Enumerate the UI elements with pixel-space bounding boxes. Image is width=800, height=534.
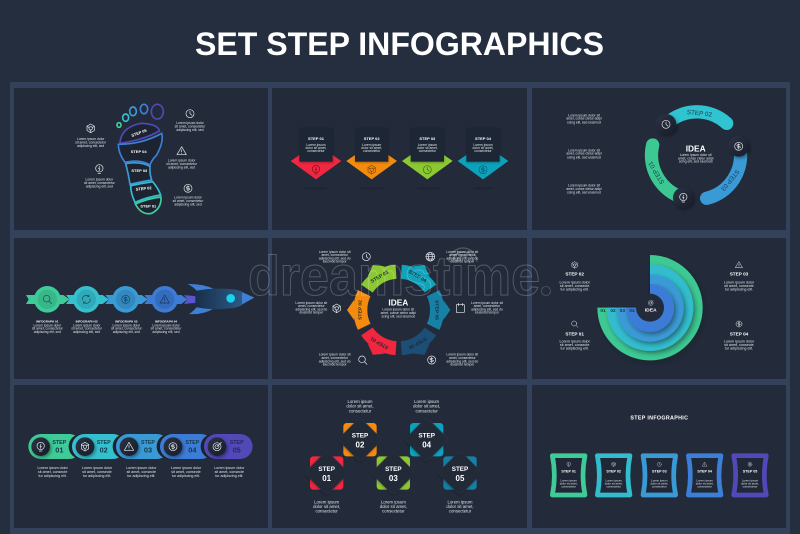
footprint captions: sit amet, consectetur — [75, 140, 107, 144]
footprint captions: adipiscing elit, sed — [77, 144, 104, 148]
pill captions: Lorem ipsum dolor — [126, 466, 157, 470]
card 01: consectetur — [561, 484, 576, 488]
diamond captions: dolor sit amet, — [446, 504, 474, 509]
spiral captions: Lorem ipsum dolor — [560, 280, 591, 284]
footprint captions: Lorem ipsum dolor — [86, 177, 114, 181]
step 02 arrow card: consectetur — [363, 149, 381, 153]
step 01 arrow card: consectetur — [307, 149, 325, 153]
pill captions: tur adipiscing elit. — [215, 474, 243, 478]
timeline captions: sit amet, consectetur — [32, 327, 64, 331]
panel: framed step cards — [532, 385, 786, 528]
step 04 diamond: 04 — [422, 441, 432, 450]
cycle labels: STEP 03 — [370, 270, 390, 285]
ring arcs — [651, 112, 741, 198]
diamond captions: Lorem ipsum — [347, 399, 373, 404]
step 05 diamond — [438, 451, 482, 495]
card 05: dolor sit amet, — [741, 481, 759, 485]
cycle captions: Lorem ipsum dolor sit — [446, 353, 478, 357]
panel: three part ring — [532, 88, 786, 230]
overlapping pills — [28, 434, 254, 459]
cycle captions — [295, 250, 503, 367]
step 04 diamond — [405, 418, 449, 462]
timeline captions: sit amet, consectetur — [151, 327, 182, 331]
spiral captions: tur adipiscing elit. — [561, 288, 589, 292]
ring centre text: scing elit, sed eiusmod — [679, 160, 713, 164]
footprint step labels: STEP 01 — [140, 203, 157, 208]
pill captions: sit amet, consecte — [127, 470, 156, 474]
pill text: 01 — [55, 445, 63, 454]
diamond captions: consectetur — [415, 408, 438, 413]
spiral captions: Lorem ipsum dolor — [560, 339, 591, 343]
pill captions: tur adipiscing elit. — [127, 474, 155, 478]
ring centre text: IDEA — [686, 143, 706, 153]
step 03 diamond: 03 — [389, 474, 398, 483]
pill captions: tur adipiscing elit. — [39, 474, 67, 478]
card 05 — [734, 456, 766, 495]
cycle centre text — [381, 298, 416, 319]
step 02 arrow card: Lorem ipsum — [362, 143, 382, 147]
diamond captions: Lorem ipsum — [314, 499, 340, 504]
card 02: STEP 02 — [606, 469, 621, 473]
pill captions — [38, 466, 245, 478]
ring labels: STEP 02 — [686, 109, 713, 119]
step 03 arrow card — [402, 128, 453, 189]
card 04: consectetur — [697, 484, 712, 488]
step 01 arrow card — [291, 128, 341, 189]
step circles — [34, 286, 178, 313]
ring labels: STEP 03 — [719, 168, 741, 192]
ring left captions: scing elit, sed eiusmod — [567, 120, 601, 124]
cycle captions: eiusmod tempor — [450, 363, 475, 367]
diamond captions: dolor sit amet, — [413, 404, 440, 409]
step 03 diamond — [371, 451, 415, 495]
ring labels — [647, 109, 741, 192]
diamond captions: Lorem ipsum — [447, 499, 473, 504]
step 01 diamond — [305, 451, 349, 495]
diamond captions — [313, 399, 474, 514]
cycle captions: adipiscing elit, sed do — [319, 359, 351, 363]
pill captions: sit amet, consecte — [38, 470, 67, 474]
timeline captions: sit amet, consectetur — [111, 327, 143, 331]
panel: concentric spiral — [532, 238, 786, 379]
cycle captions: eiusmod tempor — [323, 260, 347, 264]
diamond captions: consectetur — [349, 408, 372, 413]
cycle icons — [333, 252, 464, 364]
diamond captions: consectetur — [315, 509, 338, 514]
card 03: consectetur — [652, 484, 667, 488]
card 02: dolor sit amet, — [605, 481, 623, 485]
ring left captions: scing elit, sed eiusmod — [567, 155, 601, 159]
cycle captions: amet, consectetur — [321, 356, 349, 360]
timeline captions: INFOGRAPH 01 — [36, 319, 59, 323]
footprint captions: sit amet, consectetur — [84, 181, 116, 185]
cycle captions: eiusmod tempor — [323, 363, 347, 367]
pill text: 03 — [144, 445, 152, 454]
timeline captions — [32, 319, 182, 334]
pill icon buttons — [31, 437, 226, 456]
pill captions: sit amet, consecte — [215, 470, 244, 474]
cycle centre text: amet, conse ctetur adipi — [381, 311, 416, 315]
ring buttons — [656, 114, 749, 208]
step 03 arrow card: consectetur — [419, 149, 437, 153]
spiral captions: STEP 02 — [565, 272, 584, 277]
step 02 arrow card — [346, 128, 397, 189]
pill text: 04 — [188, 445, 197, 454]
step 02 arrow card: STEP 02 — [364, 136, 380, 141]
cycle captions: Lorem ipsum dolor sit — [471, 301, 503, 305]
cycle arrow tips — [347, 260, 450, 360]
panel: rocket timeline — [14, 238, 268, 379]
spiral captions — [560, 262, 755, 351]
title: SET STEP INFOGRAPHICS — [195, 26, 604, 62]
spiral layers — [597, 255, 703, 360]
footprint captions: Lorem ipsum dolor — [174, 196, 203, 200]
card 03: STEP 03 — [652, 469, 667, 473]
pill text: STEP — [52, 440, 67, 446]
cycle labels: STEP 04 — [407, 269, 427, 284]
cycle captions: Lorem ipsum dolor sit — [319, 353, 351, 357]
cards heading: STEP INFOGRAPHIC — [630, 415, 688, 421]
card 04: STEP 04 — [697, 469, 713, 473]
cycle captions: adipiscing elit, sed do — [446, 359, 478, 363]
cycle centre text: IDEA — [388, 298, 408, 308]
spiral captions: tur adipiscing elit. — [725, 347, 753, 351]
timeline captions: Lorem ipsum dolor — [152, 323, 181, 327]
cycle captions: amet, consectetur — [449, 356, 476, 360]
ring left captions: amet, conse ctetur adipi — [566, 117, 602, 121]
card 02: Lorem ipsum — [605, 479, 622, 483]
ring centre text: Lorem ipsum dolor sit — [680, 153, 712, 157]
footprint step labels — [131, 128, 157, 208]
footprint step labels: STEP 04 — [131, 149, 147, 154]
spiral captions: STEP 03 — [730, 272, 749, 277]
step 04 arrow card: consectetur — [474, 149, 492, 153]
diamond captions: Lorem ipsum — [414, 399, 440, 404]
card 04: dolor sit amet, — [696, 481, 714, 485]
spiral captions: STEP 04 — [730, 331, 749, 336]
timeline captions: sit amet, consectetur — [71, 327, 103, 331]
footprint step labels: STEP 03 — [131, 168, 148, 173]
panel: pill steps — [14, 385, 268, 528]
footprint captions: adipiscing elit, sed — [174, 203, 202, 207]
pill captions: Lorem ipsum dolor — [171, 466, 202, 470]
pill text — [52, 440, 244, 454]
pill captions: Lorem ipsum dolor — [214, 466, 245, 470]
cycle captions: amet, consectetur — [321, 253, 349, 257]
card 03: dolor sit amet, — [650, 481, 668, 485]
panel: footprint steps — [14, 88, 268, 230]
cycle captions: eiusmod tempor — [299, 311, 324, 315]
spiral centre: IDEA — [645, 308, 657, 314]
panel: six part cycle — [272, 238, 527, 379]
pill captions: tur adipiscing elit. — [172, 474, 200, 478]
cycle centre text: Lorem ipsum dolor sit — [382, 307, 414, 311]
card 04 — [688, 456, 721, 495]
step 03 arrow card: dolor sit amet, — [417, 146, 438, 150]
panel: diamond steps — [272, 385, 527, 528]
spiral numbers: 04 — [629, 308, 635, 313]
step 01 arrow card: STEP 01 — [308, 136, 325, 141]
step 01 arrow card: Lorem ipsum — [306, 143, 326, 147]
step 04 diamond: STEP — [418, 433, 435, 440]
step 03 arrow card: STEP 03 — [419, 136, 436, 141]
step 01 diamond: STEP — [318, 466, 335, 473]
watermark: dreamstime — [248, 244, 540, 307]
pill captions: sit amet, consecte — [171, 470, 201, 474]
timeline captions: Lorem ipsum dolor — [73, 323, 101, 327]
pill text: 02 — [100, 445, 108, 454]
card 01: dolor sit amet, — [560, 481, 578, 485]
spiral captions: Lorem ipsum dolor — [724, 339, 755, 343]
footprint step labels: STEP 02 — [135, 185, 153, 192]
footprint captions: sit amet, consectetur — [175, 124, 206, 128]
cycle labels — [358, 269, 440, 350]
ring left captions — [566, 113, 602, 195]
timeline captions: adipiscing elit, sed — [152, 330, 180, 334]
ring centre text — [678, 143, 714, 164]
ring left captions: amet, conse ctetur adipi — [566, 187, 602, 191]
pill captions: tur adipiscing elit. — [83, 474, 111, 478]
ring left captions: scing elit, sed eiusmod — [567, 191, 601, 195]
spiral captions: sit amet, consecte — [724, 343, 754, 347]
step 02 diamond: STEP — [352, 433, 368, 440]
cycle captions: eiusmod tempor — [450, 260, 475, 264]
footprint captions: Lorem ipsum dolor — [77, 137, 105, 141]
card 02 — [597, 456, 630, 495]
diamond captions: dolor sit amet, — [313, 504, 340, 509]
step 05 diamond: STEP — [452, 466, 468, 473]
timeline captions: INFOGRAPH 04 — [155, 319, 177, 323]
cycle captions: amet, consectetur — [298, 304, 325, 308]
spiral numbers: 03 — [620, 308, 625, 313]
card 05: STEP 05 — [743, 469, 757, 473]
diamond captions: consectetur — [382, 509, 405, 514]
footprint segments — [118, 123, 162, 214]
spiral captions: sit amet, consecte — [560, 343, 589, 347]
timeline captions: Lorem ipsum dolor — [34, 323, 62, 327]
timeline captions: Lorem ipsum dolor — [113, 323, 141, 327]
card 02: consectetur — [606, 484, 621, 488]
ring left captions: Lorem ipsum dolor sit — [568, 184, 600, 188]
card 05: Lorem ipsum — [742, 479, 759, 483]
timeline captions: adipiscing elit, sed — [73, 330, 100, 334]
diamond captions: consectetur — [449, 509, 472, 514]
spiral captions: tur adipiscing elit. — [725, 288, 753, 292]
diamond captions: dolor sit amet, — [380, 504, 407, 509]
timeline captions: INFOGRAPH 02 — [76, 319, 98, 323]
pill captions: sit amet, consecte — [82, 470, 112, 474]
footprint captions: sit amet, consectetur — [173, 199, 204, 203]
step 04 arrow card: dolor sit amet, — [473, 146, 494, 150]
pill captions: Lorem ipsum dolor — [38, 466, 69, 470]
timeline captions: INFOGRAPH 03 — [115, 319, 138, 323]
step 02 diamond — [338, 418, 382, 462]
pill text: STEP — [185, 440, 200, 446]
footprint captions — [75, 121, 206, 207]
footprint captions: sit amet, consectetur — [166, 162, 198, 166]
cycle labels: STEP 01 — [370, 335, 390, 350]
spiral centre — [645, 300, 657, 314]
footprint captions: adipiscing elit, sed — [168, 166, 195, 170]
spiral numbers — [600, 308, 635, 313]
step 05 diamond: 05 — [456, 474, 465, 483]
card 04: Lorem ipsum — [696, 479, 713, 483]
spiral captions: sit amet, consecte — [560, 284, 589, 288]
pill text: STEP — [230, 440, 244, 446]
pill text: STEP — [141, 440, 155, 446]
footprint captions: adipiscing elit, sed — [86, 185, 113, 189]
footprint captions: adipiscing elit, sed — [176, 128, 204, 132]
cycle captions: Lorem ipsum dolor sit — [319, 250, 351, 254]
timeline captions: adipiscing elit, sed — [113, 330, 140, 334]
ring left captions: Lorem ipsum dolor sit — [568, 113, 600, 117]
cycle captions: amet, consectetur — [449, 253, 476, 257]
cycle captions: adipiscing elit, sed do — [319, 256, 351, 260]
step 03 arrow card: Lorem ipsum — [418, 143, 437, 147]
card 03 — [643, 456, 676, 495]
spiral numbers: 02 — [610, 308, 616, 313]
cycle labels: STEP 05 — [434, 300, 440, 320]
footprint step labels: STEP 05 — [131, 128, 148, 138]
ring left captions: Lorem ipsum dolor sit — [568, 148, 600, 152]
pill text: 05 — [233, 445, 241, 454]
card 01: Lorem ipsum — [560, 479, 577, 483]
diamond captions: dolor sit amet, — [346, 404, 374, 409]
footprint toes — [117, 104, 163, 127]
cycle captions: eiusmod tempor — [475, 311, 500, 315]
ring centre text: amet, conse ctetur adipi — [678, 156, 714, 160]
footprint icons — [87, 110, 194, 192]
card 03: Lorem ipsum — [651, 479, 668, 483]
step 01 diamond: 01 — [322, 474, 332, 483]
cycle captions: adipiscing elit, sed do — [471, 307, 503, 311]
step 01 arrow card: dolor sit amet, — [306, 146, 327, 150]
pill text: STEP — [97, 440, 111, 446]
step 02 diamond: 02 — [356, 441, 365, 450]
card 01 — [552, 456, 585, 495]
timeline captions: adipiscing elit, sed — [34, 330, 61, 334]
ring left captions: amet, conse ctetur adipi — [566, 152, 602, 156]
spiral numbers: 01 — [600, 308, 606, 313]
step 02 arrow card: dolor sit amet, — [361, 146, 382, 150]
ring labels: STEP 01 — [647, 160, 666, 185]
step 04 arrow card: STEP 04 — [475, 136, 492, 141]
footprint captions: Lorem ipsum dolor — [176, 121, 205, 125]
cycle captions: Lorem ipsum dolor sit — [446, 250, 478, 254]
diamond captions: Lorem ipsum — [381, 499, 406, 504]
step 04 arrow card: Lorem ipsum — [473, 143, 493, 147]
card 01: STEP 01 — [561, 469, 576, 473]
cycle labels: STEP 06 — [407, 335, 428, 350]
panel: four arrow steps — [272, 88, 527, 230]
pill captions: Lorem ipsum dolor — [82, 466, 113, 470]
cycle captions: adipiscing elit, sed do — [295, 307, 327, 311]
step 04 arrow card — [458, 128, 508, 189]
cycle captions: adipiscing elit, sed do — [446, 256, 478, 260]
spiral captions: STEP 01 — [565, 331, 584, 336]
card 05: consectetur — [743, 484, 757, 488]
step 03 diamond: STEP — [385, 466, 402, 473]
rocket — [188, 284, 254, 314]
cycle captions: Lorem ipsum dolor sit — [295, 301, 327, 305]
cycle labels: STEP 02 — [358, 300, 364, 320]
spiral captions: Lorem ipsum dolor — [724, 280, 755, 284]
footprint captions: Lorem ipsum dolor — [168, 158, 196, 162]
cycle centre text: scing elit, sed eiusmod — [381, 315, 415, 319]
cycle arcs — [360, 272, 437, 348]
spiral captions: sit amet, consecte — [724, 284, 754, 288]
chevron band — [26, 295, 200, 304]
spiral captions: tur adipiscing elit. — [561, 347, 589, 351]
cycle captions: amet, consectetur — [474, 304, 501, 308]
